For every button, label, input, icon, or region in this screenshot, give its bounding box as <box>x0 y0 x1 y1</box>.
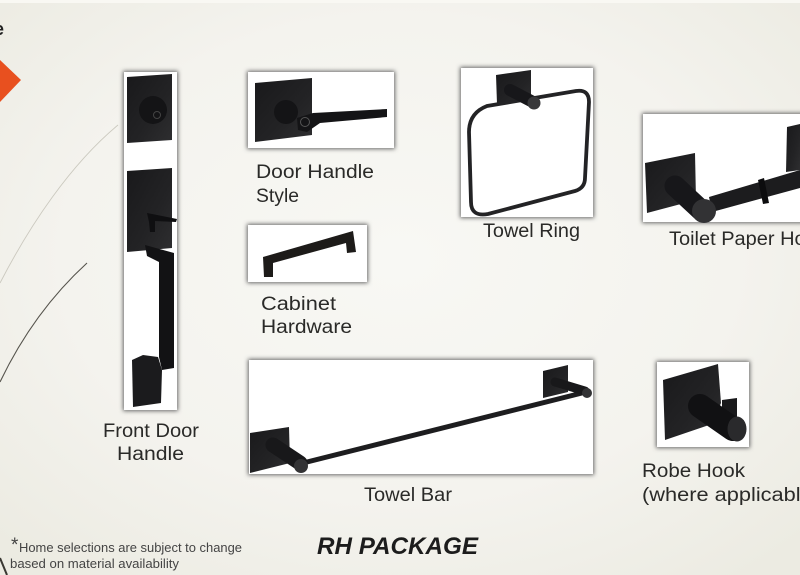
footnote <box>10 535 242 571</box>
label: robe hook <box>642 461 800 506</box>
footnote: based on material availability <box>10 556 179 571</box>
label: door handle style <box>256 162 374 207</box>
icon: towel bar <box>250 365 592 473</box>
footnote: * <box>11 535 19 556</box>
label: towel bar: Towel Bar <box>364 485 453 506</box>
panel: front door handle <box>123 71 178 411</box>
footnote: Home selections are subject to change <box>19 540 242 555</box>
panel: robe hook <box>656 361 750 448</box>
label: towel ring: Towel Ring <box>483 221 580 242</box>
label: door handle style: Style <box>256 186 299 207</box>
heading: RH package: RH PACKAGE <box>317 533 479 560</box>
label: front door handle: Front Door <box>103 421 200 442</box>
panel: door handle style <box>247 71 395 149</box>
panel: towel ring <box>460 67 594 218</box>
label: front door handle <box>103 421 200 465</box>
label: cabinet hardware: Hardware <box>261 317 352 338</box>
icon: deadbolt <box>127 74 172 143</box>
decorative curve lines <box>0 125 118 575</box>
icon: towel ring <box>469 70 589 214</box>
label: robe hook: (where applicable) <box>642 485 800 506</box>
label: robe hook: Robe Hook <box>642 461 746 482</box>
panel: cabinet hardware <box>247 224 368 283</box>
label: cabinet hardware: Cabinet <box>261 294 337 315</box>
icon: orange diamond <box>0 60 21 102</box>
icon: lever handle <box>255 78 387 142</box>
label: cabinet hardware <box>261 294 352 338</box>
label: door handle style: Door Handle <box>256 162 374 183</box>
panel: toilet paper holder <box>642 113 800 223</box>
icon: toilet paper holder <box>645 124 800 223</box>
icon: robe hook <box>663 364 746 442</box>
panel: towel bar <box>248 359 594 475</box>
icon: handle set <box>127 168 177 407</box>
icon: cabinet pull <box>263 231 356 277</box>
label: front door handle: Handle <box>117 444 184 465</box>
